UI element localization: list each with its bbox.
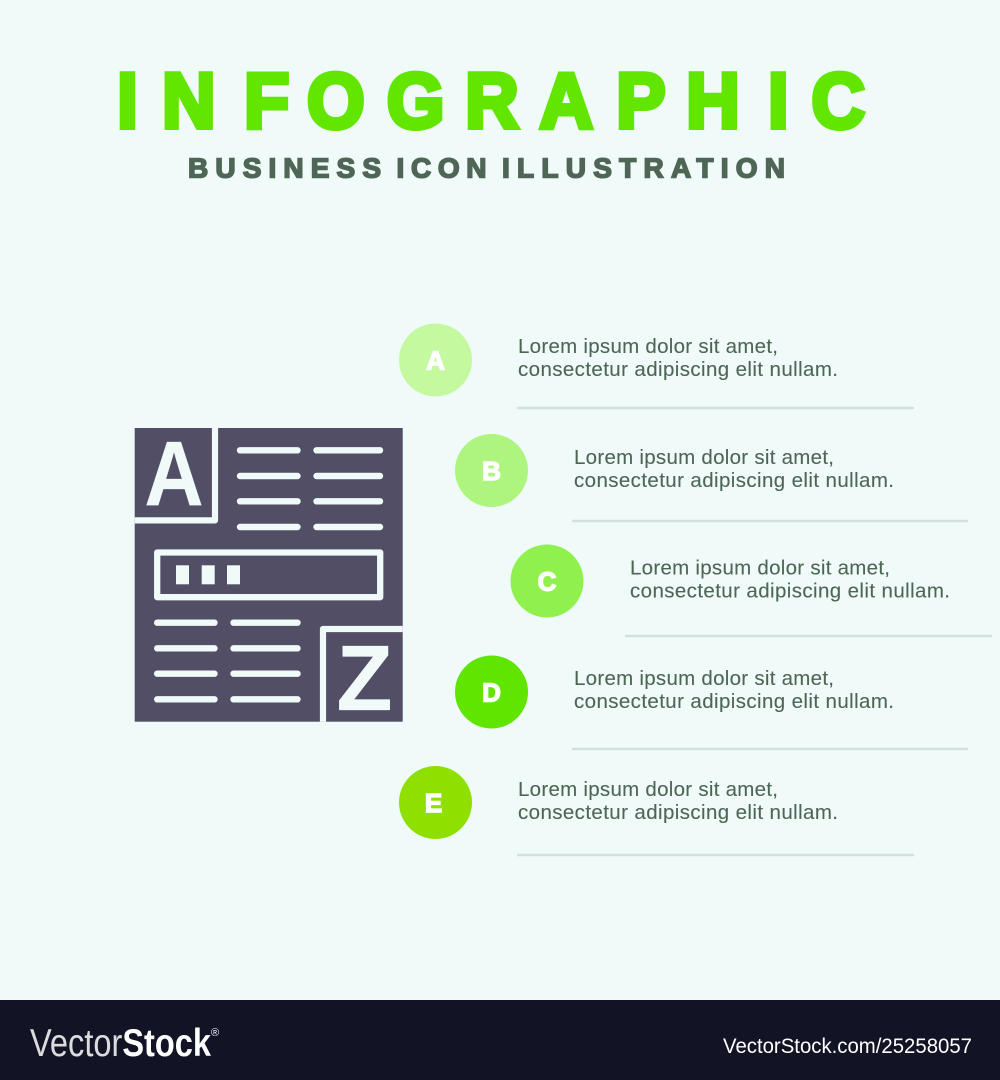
- badge B: [455, 434, 528, 507]
- icon letter Z: Z: [336, 626, 392, 730]
- subtitle: [188, 152, 785, 184]
- text E: Lorem ipsum dolor sit amet,: [518, 778, 778, 801]
- text A: Lorem ipsum dolor sit amet,: [518, 335, 778, 358]
- text D: consectetur adipiscing elit nullam.: [574, 690, 894, 713]
- text A: consectetur adipiscing elit nullam.: [518, 358, 838, 381]
- icon letter A: A: [144, 423, 204, 525]
- badge C: [510, 544, 584, 618]
- text C: consectetur adipiscing elit nullam.: [630, 580, 950, 602]
- badge D: D: [482, 678, 501, 708]
- badge E: [399, 766, 472, 839]
- badge A: A: [426, 346, 445, 376]
- badge C: C: [538, 566, 557, 596]
- badge B: B: [482, 456, 501, 486]
- text C: [630, 556, 950, 602]
- VectorStock logo: VectorStock: [30, 1022, 211, 1065]
- subtitle: ILLUSTRATION: [502, 152, 785, 184]
- item D: [455, 656, 968, 749]
- registered mark: ®: [211, 1027, 219, 1039]
- badge D: [455, 656, 528, 728]
- badge A: [399, 324, 472, 396]
- item C: [510, 544, 992, 636]
- title: INFOGRAPHIC: [117, 58, 865, 145]
- lower text lines: [157, 623, 298, 699]
- text D: Lorem ipsum dolor sit amet,: [574, 667, 834, 690]
- item B: [455, 434, 968, 521]
- footer bar: [0, 1000, 1000, 1080]
- image id: VectorStock.com/25258057: [723, 1035, 972, 1058]
- text C: Lorem ipsum dolor sit amet,: [630, 556, 890, 580]
- subtitle: BUSINESS: [188, 152, 381, 184]
- text B: consectetur adipiscing elit nullam.: [574, 469, 894, 492]
- icon: A-Z index document: [135, 423, 403, 730]
- badge E: E: [425, 788, 442, 818]
- text E: [518, 778, 838, 824]
- subtitle: ICON: [396, 152, 486, 184]
- item E: [399, 766, 914, 855]
- search bar: [157, 552, 380, 597]
- text A: [518, 335, 838, 381]
- upper text lines: [240, 450, 380, 527]
- item A: [399, 324, 914, 408]
- text B: Lorem ipsum dolor sit amet,: [574, 446, 834, 469]
- text D: [574, 667, 894, 713]
- text B: [574, 446, 894, 492]
- text E: consectetur adipiscing elit nullam.: [518, 801, 838, 824]
